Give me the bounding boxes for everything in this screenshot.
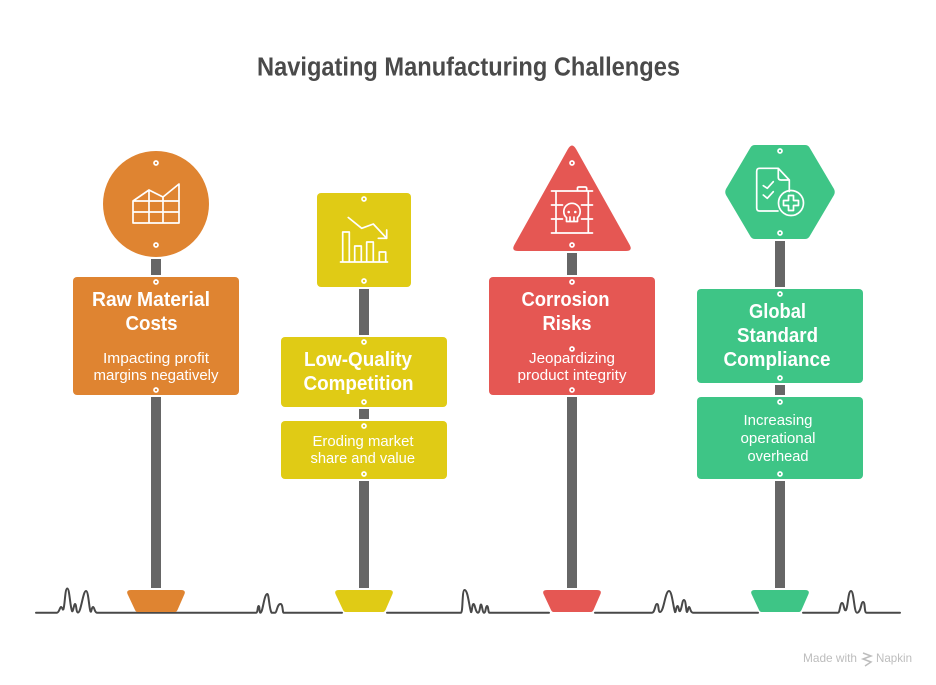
description: Jeopardizing <box>529 350 615 367</box>
hexagon sign <box>725 145 835 239</box>
heading <box>724 301 830 371</box>
icon: toxic barrel <box>552 187 592 233</box>
description: share and value <box>310 450 415 467</box>
card: Corrosion Risks <box>489 277 655 395</box>
heading <box>522 289 610 335</box>
signpost: Low-Quality Competition <box>281 193 447 612</box>
description <box>94 350 219 384</box>
post <box>151 259 161 588</box>
heading: Costs <box>126 313 178 335</box>
card: Eroding market <box>281 421 447 479</box>
description: Increasing <box>744 412 812 429</box>
card holes <box>570 280 574 392</box>
sign holes <box>154 161 158 247</box>
description: operational <box>740 430 816 447</box>
heading <box>304 349 414 395</box>
card holes <box>154 280 158 392</box>
heading: Global <box>749 301 806 323</box>
heading: Standard <box>737 325 818 347</box>
icon: checklist with plus <box>757 168 804 216</box>
card holes <box>362 340 366 476</box>
circular sign <box>103 151 209 257</box>
base <box>543 590 601 612</box>
icon: falling bar chart <box>340 218 388 262</box>
watermark: Made with Napkin: Made with <box>803 651 857 665</box>
heading: Compliance <box>724 349 830 371</box>
description: product integrity <box>518 367 627 384</box>
card holes <box>778 292 782 476</box>
post <box>775 241 785 588</box>
heading: Raw Material <box>92 289 210 311</box>
description: overhead <box>748 448 808 465</box>
watermark: Made with Napkin: Napkin <box>876 651 912 665</box>
heading: Competition <box>304 373 414 395</box>
card: Low-Quality Competition <box>281 337 447 407</box>
description <box>518 350 627 384</box>
square sign <box>317 193 411 287</box>
heading: Risks <box>542 313 592 335</box>
base <box>335 590 393 612</box>
description: Eroding market <box>312 433 414 450</box>
heading: Corrosion <box>522 289 610 311</box>
description: Impacting profit <box>103 350 210 367</box>
description: margins negatively <box>94 367 219 384</box>
signpost: Raw Material Costs <box>73 151 239 612</box>
description <box>310 433 415 467</box>
heading: Low-Quality <box>304 349 413 371</box>
icon: area chart grid <box>133 184 179 223</box>
title: Navigating Manufacturing Challenges <box>257 54 680 82</box>
ground line with grass <box>36 588 900 613</box>
card: Increasing overhead <box>697 397 863 479</box>
post <box>567 253 577 588</box>
post <box>359 289 369 588</box>
card: Global Standard Compliance <box>697 289 863 383</box>
sign holes <box>362 197 366 283</box>
description <box>740 412 816 465</box>
base <box>127 590 185 612</box>
signpost: Global Standard Compliance <box>697 145 863 612</box>
watermark: Made with Napkin <box>803 651 912 666</box>
heading <box>92 289 210 335</box>
sign holes <box>778 149 782 235</box>
sign holes <box>570 161 574 247</box>
signpost: Corrosion Risks <box>489 145 655 612</box>
base <box>751 590 809 612</box>
icon: Napkin logo <box>863 653 871 666</box>
triangular sign <box>513 145 631 251</box>
card: Raw Material Costs <box>73 277 239 395</box>
